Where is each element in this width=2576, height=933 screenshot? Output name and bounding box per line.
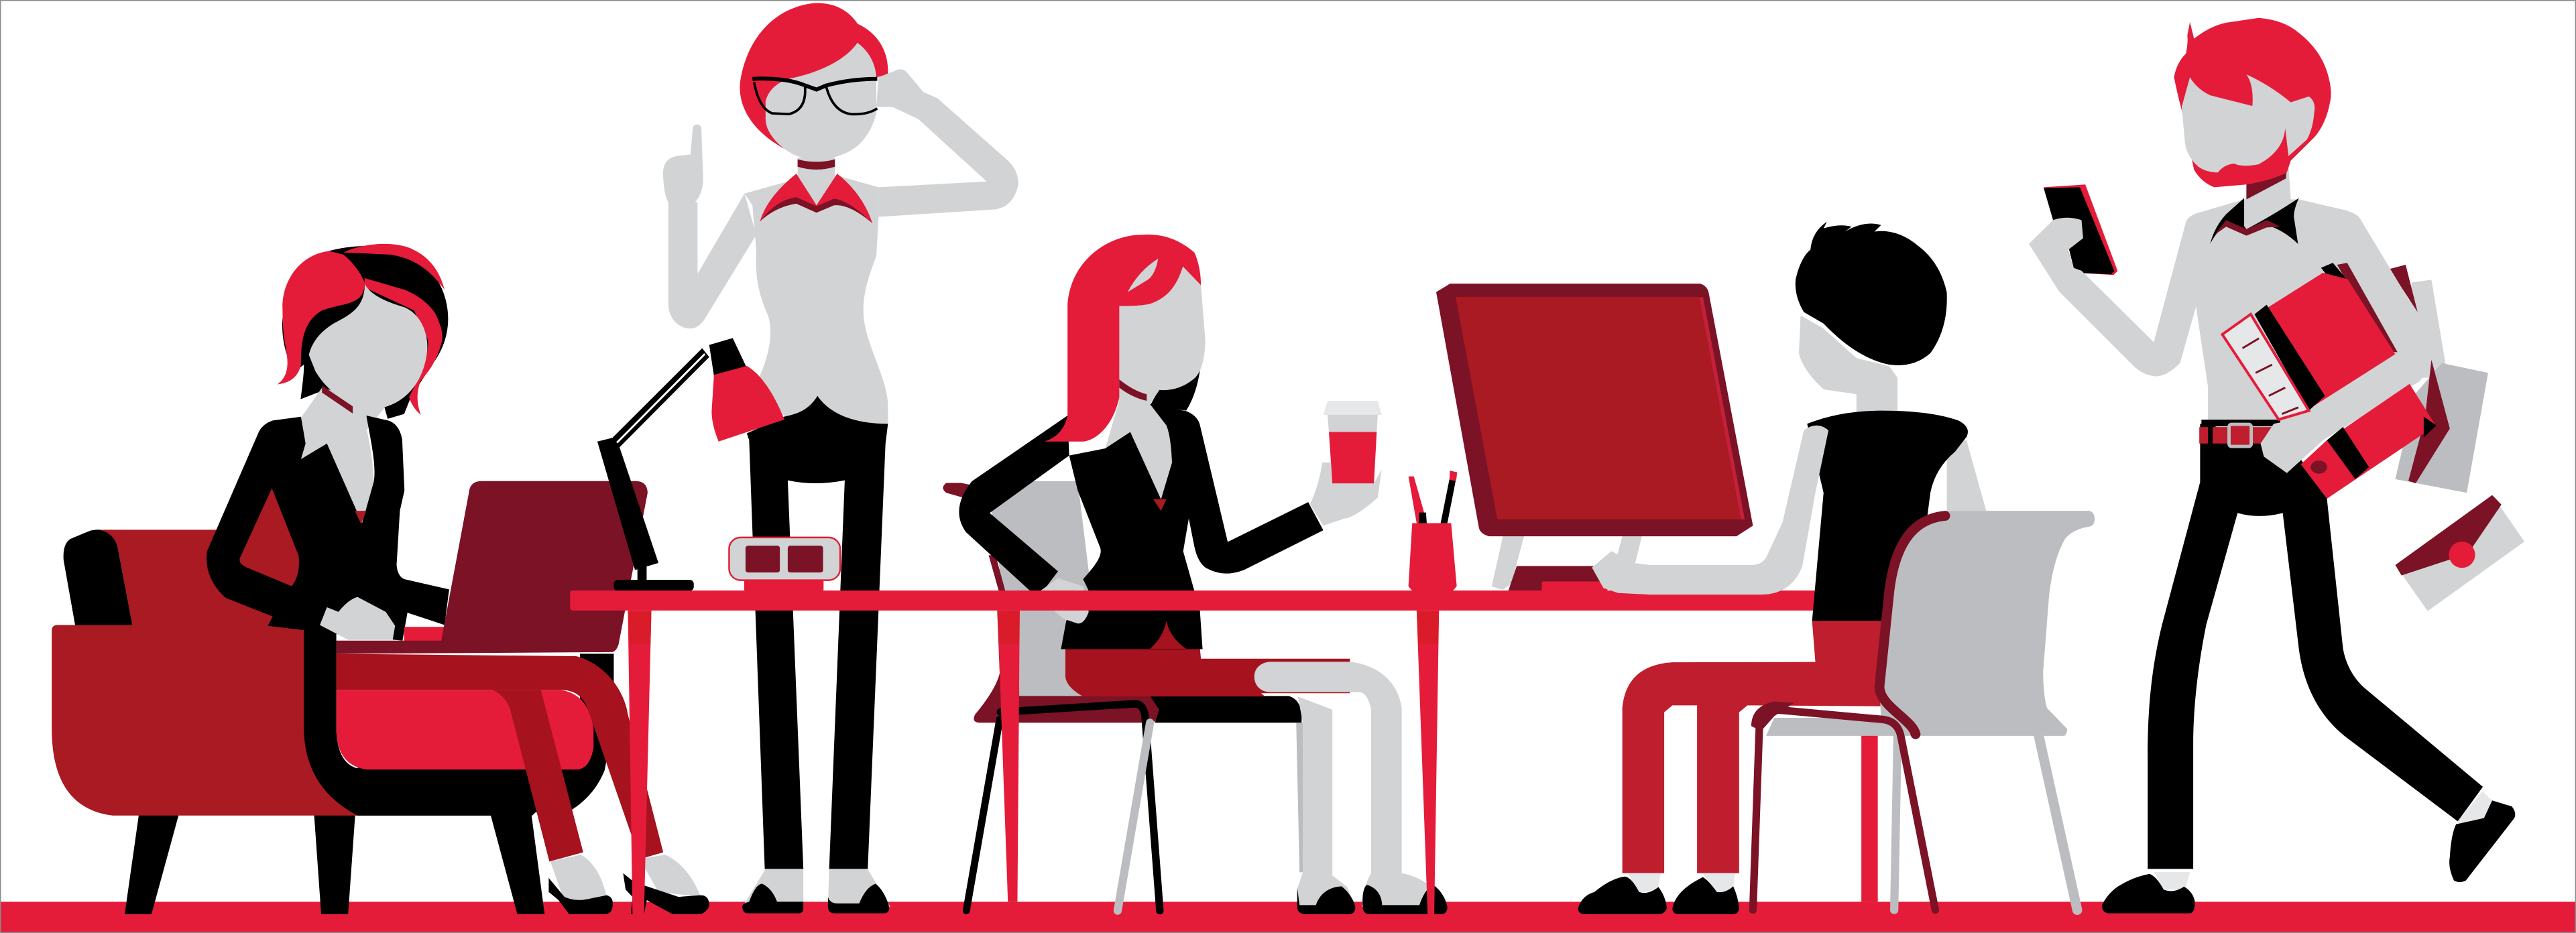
office chair: man's chair	[1751, 511, 2095, 910]
person: seated woman with coffee	[959, 235, 1448, 914]
glasses	[752, 78, 877, 114]
hair behind	[1150, 361, 1201, 411]
neck	[798, 158, 835, 207]
grey far leg	[1298, 696, 1355, 907]
neck and ear	[1799, 316, 1897, 414]
black shirt	[1807, 411, 1968, 621]
neck	[2244, 167, 2291, 222]
socks	[2154, 872, 2190, 889]
armchair	[52, 530, 613, 914]
phone	[2044, 184, 2117, 275]
hand	[320, 597, 395, 640]
pants	[1065, 649, 1350, 696]
face	[309, 284, 427, 409]
hair	[1796, 222, 1947, 365]
raised left arm	[663, 125, 756, 328]
lamp shade	[711, 366, 784, 442]
hand on hip	[1035, 578, 1089, 623]
forearm over binder	[2261, 324, 2432, 473]
office chair: grey back	[943, 481, 1301, 911]
person: man at computer	[1578, 222, 1986, 914]
envelope	[2395, 495, 2524, 611]
pen holder	[1409, 471, 1457, 591]
person: walking man with phone and binder	[2029, 18, 2515, 914]
neckline accent	[1153, 499, 1167, 511]
choker	[798, 160, 835, 170]
choker	[1119, 379, 1147, 401]
red pants	[1623, 621, 1889, 873]
shoes	[2102, 874, 2195, 914]
neck and chest	[1106, 375, 1172, 499]
person: standing woman with glasses	[663, 3, 1018, 914]
pants	[2148, 424, 2483, 869]
collar	[760, 174, 872, 223]
collar	[2210, 198, 2299, 244]
monitor	[1436, 284, 1753, 591]
person: seated woman with laptop	[207, 244, 449, 641]
shoes	[1578, 877, 1667, 914]
shoes	[1297, 886, 1355, 914]
binder	[2222, 263, 2437, 499]
pants: seated woman	[337, 654, 709, 914]
arm on mouse	[1592, 426, 1828, 595]
neckline accent	[355, 511, 366, 524]
table	[570, 590, 1878, 914]
hair	[2174, 18, 2331, 187]
hair red left lobe	[278, 251, 365, 384]
hair	[740, 3, 888, 149]
red strip on table under monitor	[1542, 582, 1608, 591]
near leg	[1254, 662, 1448, 907]
face	[1119, 266, 1206, 390]
chest skin	[300, 387, 386, 525]
shoes	[743, 869, 803, 907]
jacket tail notch	[1150, 621, 1186, 649]
choker	[322, 385, 353, 414]
face	[2182, 74, 2315, 172]
face	[766, 43, 876, 160]
torso	[744, 176, 888, 424]
jacket	[207, 416, 449, 641]
jacket	[1061, 404, 1324, 649]
grey upper arm behind	[1947, 440, 1986, 511]
coffee cup and hand	[1310, 401, 1382, 525]
phone arm	[2029, 200, 2432, 473]
arm gap	[239, 488, 299, 586]
shoe right	[640, 855, 701, 897]
laptop	[337, 481, 648, 654]
hair red crown	[343, 244, 445, 290]
desk lamp	[597, 338, 784, 591]
pants	[747, 396, 888, 869]
alarm clock	[729, 538, 840, 591]
floor	[0, 901, 2576, 933]
belt	[2201, 420, 2280, 426]
hair red strand	[365, 278, 443, 415]
right arm to glasses	[876, 69, 1018, 216]
hair	[1044, 235, 1201, 442]
paper stack	[2390, 265, 2488, 493]
socks	[1628, 873, 1661, 893]
hair back	[278, 246, 448, 419]
shoe left	[550, 855, 607, 901]
